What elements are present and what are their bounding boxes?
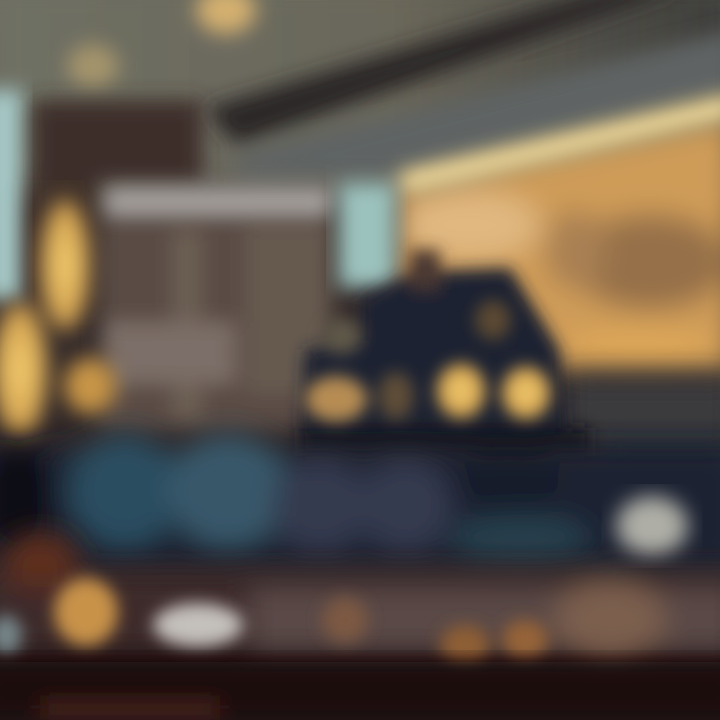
teal window xyxy=(338,182,396,288)
house windows xyxy=(305,300,551,422)
table items xyxy=(0,578,548,665)
ceiling beam xyxy=(205,0,720,178)
ceiling light spots xyxy=(67,0,256,88)
dark upper building xyxy=(30,100,202,310)
left window xyxy=(0,90,24,300)
white cushion xyxy=(616,496,688,556)
house xyxy=(300,250,590,456)
table band xyxy=(0,532,720,662)
sofa blobs xyxy=(0,434,720,568)
left lamps xyxy=(0,199,116,438)
right dark band xyxy=(565,378,720,560)
foreground dark table xyxy=(0,662,720,720)
central building xyxy=(100,187,333,430)
wall light band xyxy=(400,92,720,195)
ceiling xyxy=(0,0,720,180)
orange wall xyxy=(395,115,720,372)
